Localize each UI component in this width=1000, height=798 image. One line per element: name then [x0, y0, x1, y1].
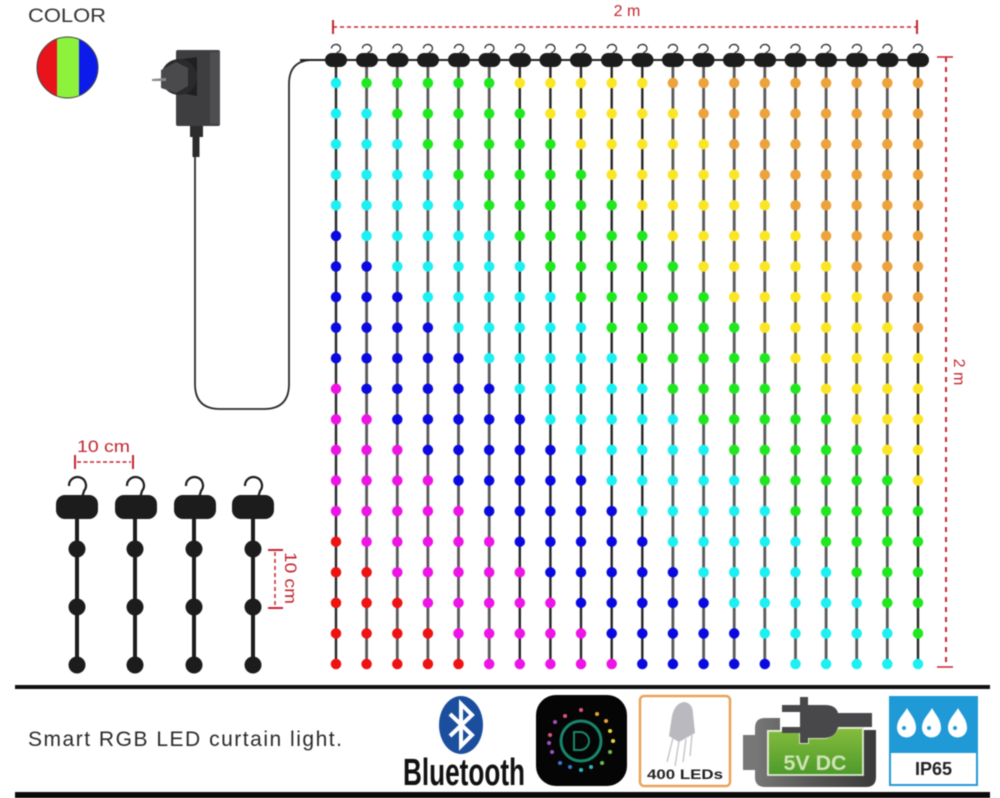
icon: IP65: IP65 — [915, 759, 952, 779]
icon: Bluetooth — [403, 696, 525, 794]
dimension: 2 m height: 2 m — [950, 359, 967, 385]
dimension: 10 cm LED pitch: 10 cm — [281, 552, 300, 604]
icon: 5V DC: 5V DC — [784, 752, 846, 775]
LED grid — [336, 83, 918, 665]
dimension: 2 m height — [937, 57, 967, 667]
curtain top rail with hangers — [300, 44, 922, 60]
icon: IP65 — [889, 696, 978, 786]
icon: Bluetooth: Bluetooth — [403, 752, 525, 794]
icon: 400 LEDs: 400 LEDs — [647, 767, 723, 782]
LED bulb graphic — [667, 702, 695, 766]
icon: 400 LEDs — [640, 696, 730, 786]
icon: 5V DC — [743, 697, 876, 787]
dimension: 10 cm LED pitch — [268, 550, 300, 608]
dimension: 2 m width — [333, 3, 917, 34]
icon: app — [536, 695, 627, 786]
dimension: 10 cm spacing — [75, 437, 133, 469]
icon: RGB color swatch — [37, 37, 99, 98]
strand detail: four hangers with LEDs — [56, 477, 274, 674]
dimension: 10 cm spacing: 10 cm — [77, 437, 130, 456]
product description: Smart RGB LED curtain light. — [28, 728, 342, 751]
dimension: 2 m width: 2 m — [614, 3, 640, 20]
curtain strands — [336, 60, 918, 664]
icon: power adapter — [152, 50, 220, 157]
power cable — [195, 60, 336, 409]
color label: COLOR — [28, 6, 106, 27]
divider bottom — [15, 792, 990, 798]
divider top — [15, 685, 990, 689]
